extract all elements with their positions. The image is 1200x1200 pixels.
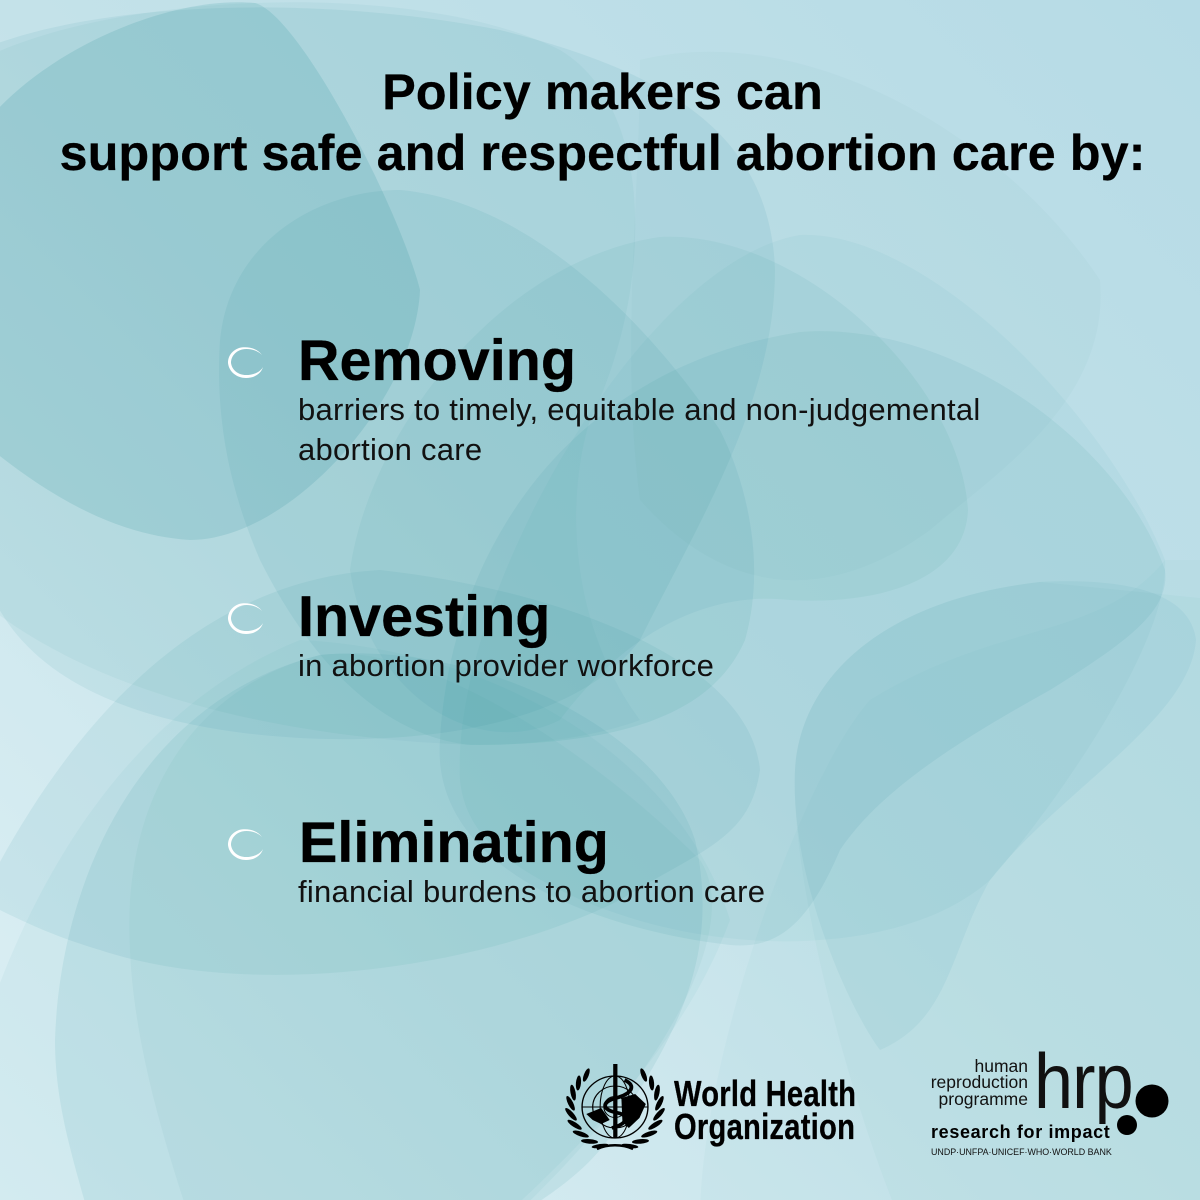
icon: ring bullet <box>228 603 263 634</box>
wordmark: Organization <box>674 1106 855 1147</box>
icon: WHO emblem <box>565 1064 665 1150</box>
programme name: human <box>974 1056 1028 1076</box>
text block: barriers to timely, equitable and non-judgemental <box>298 392 980 427</box>
icon: ring bullet <box>228 347 263 378</box>
tagline: research for impact <box>931 1122 1110 1142</box>
title: Policy makers can <box>382 63 823 120</box>
text block: in abortion provider workforce <box>298 648 714 683</box>
text block: abortion care <box>298 432 482 467</box>
text block <box>298 392 980 467</box>
dots <box>1117 1084 1168 1135</box>
title <box>60 63 1145 181</box>
heading: Eliminating <box>299 811 609 875</box>
item: eliminating <box>228 811 765 909</box>
partners: UNDP·UNFPA·UNICEF·WHO·WORLD BANK <box>931 1147 1112 1157</box>
programme name <box>931 1056 1028 1109</box>
heading: Removing <box>298 329 576 393</box>
programme name: programme <box>939 1089 1028 1109</box>
heading: Investing <box>298 585 550 649</box>
item: investing <box>228 585 714 683</box>
hrp wordmark: hrp <box>1034 1037 1133 1125</box>
icon: ring bullet <box>228 829 263 860</box>
logo: HRP <box>931 1037 1168 1157</box>
item: removing <box>228 329 980 467</box>
logo: World Health Organization <box>565 1064 856 1150</box>
wordmark <box>674 1073 856 1147</box>
title: support safe and respectful abortion care by: <box>60 124 1145 180</box>
wordmark: World Health <box>674 1073 856 1114</box>
programme name: reproduction <box>931 1072 1028 1092</box>
text block: financial burdens to abortion care <box>298 874 765 909</box>
